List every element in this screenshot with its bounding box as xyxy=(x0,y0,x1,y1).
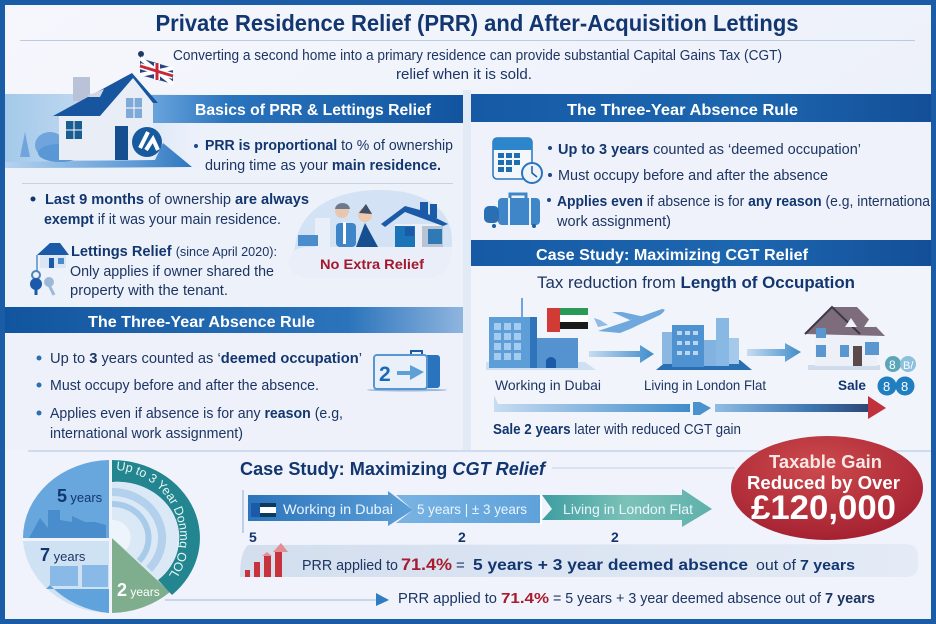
bullet list: international work assignment) xyxy=(50,425,243,442)
lettings relief text: property with the tenant. xyxy=(70,282,228,299)
callout: taxable gain reduced: £120,000 xyxy=(751,489,896,527)
pie chart: occupation years: 7 years xyxy=(40,545,86,565)
bullet list: Must occupy before and after the absence xyxy=(558,167,828,184)
bullet list: Up to 3 years counted as ‘deemed occupation’ xyxy=(50,350,362,367)
bullet list xyxy=(547,141,931,230)
house badges xyxy=(885,356,916,372)
bullet: PRR proportional xyxy=(194,137,453,174)
bullet list: Applies even if absence is for any reason (e.g, internationa xyxy=(557,193,931,210)
bullet list: Up to 3 years counted as ‘deemed occupation’ xyxy=(558,141,861,158)
panel: case study with occupation timeline xyxy=(471,240,931,450)
arrow: timeline xyxy=(494,395,886,419)
arrow: Dubai to London xyxy=(589,345,654,363)
callout: taxable gain reduced: Taxable Gain xyxy=(769,452,882,472)
result band: PRR applied xyxy=(240,543,918,577)
lettings relief text: Lettings Relief (since April 2020): xyxy=(71,243,277,260)
bullet: last 9 months xyxy=(30,191,309,228)
result band: PRR applied: PRR applied to xyxy=(302,557,398,574)
timeline caption: Sale 2 years later with reduced CGT gain xyxy=(493,422,741,438)
arrow: London to sale xyxy=(747,343,801,362)
house badges: B/ xyxy=(903,360,914,372)
result text: 71.4% xyxy=(501,591,549,607)
arrow band: timeline stages: Working in Dubai xyxy=(283,501,393,517)
pie chart: occupation years xyxy=(23,460,200,613)
icon: bar chart xyxy=(245,543,288,577)
panel: three-year absence rule, right: The Three-Year Absence Rule xyxy=(567,102,798,119)
icon: house and keys xyxy=(30,243,69,295)
icon: small house xyxy=(381,202,448,247)
bullet list: Must occupy before and after the absence. xyxy=(50,377,319,394)
chart subtitle: Tax reduction from Length of Occupation xyxy=(537,273,855,292)
intro text: relief when it is sold. xyxy=(396,66,532,83)
callout: taxable gain reduced: Reduced by Over xyxy=(747,473,900,493)
panel: three-year absence rule, right xyxy=(471,94,931,240)
timeline labels: Living in London Flat xyxy=(644,377,766,393)
callout: no extra relief: No Extra Relief xyxy=(320,256,424,272)
icon: sale house xyxy=(805,307,916,372)
arrow band: timeline stages: Living in London Flat xyxy=(563,501,693,517)
icon: flag xyxy=(251,503,276,517)
sale badges: 8 xyxy=(883,379,890,394)
result band: PRR applied: out of xyxy=(756,557,797,574)
icon: advisers xyxy=(298,203,378,247)
panel: lower case study xyxy=(23,450,931,619)
icon: suitcase with arrow xyxy=(367,351,447,392)
house badges: 8 xyxy=(889,358,896,372)
icon: union flag xyxy=(138,51,173,84)
result text xyxy=(398,591,875,607)
bullet: last 9 months: Last 9 months of ownership are always xyxy=(45,191,309,208)
callout: no extra relief xyxy=(288,190,452,278)
result band: PRR applied: = xyxy=(456,557,465,574)
panel: basics of PRR and lettings relief xyxy=(5,51,463,307)
timeline numbers: 2 xyxy=(458,529,466,545)
pie labels: 5 years xyxy=(57,486,103,506)
intro text xyxy=(173,47,782,83)
icon: luggage xyxy=(484,194,540,228)
bullet: last 9 months: exempt if it was your main residence. xyxy=(44,211,281,228)
lettings relief text: Only applies if owner shared the xyxy=(70,263,274,280)
icon: Dubai buildings xyxy=(486,298,596,370)
bullet list: Applies even if absence is for any reason (e.g, xyxy=(50,405,343,422)
sale badges: 8 xyxy=(901,379,908,394)
heading: case study: Case Study: Maximizing CGT Relief xyxy=(240,459,547,479)
curved ring label: Up to 3 Year Donmg OOL xyxy=(117,462,187,576)
bullet list: work assignment) xyxy=(556,213,671,230)
result band: PRR applied: 71.4% xyxy=(401,555,452,574)
icon: house with flag xyxy=(5,51,192,168)
title: Private Residence Relief (PRR) and After-Acquisition Lettings xyxy=(156,10,798,36)
timeline labels: Sale xyxy=(838,377,866,393)
icon: plane xyxy=(594,309,665,333)
intro text: Converting a second home into a primary residence can provide substantial Capital Gains Tax (CGT) xyxy=(173,47,782,64)
timeline labels xyxy=(495,377,866,393)
arrow band: timeline stages xyxy=(243,489,712,533)
lettings relief text xyxy=(70,243,277,299)
panel: three-year absence rule, left xyxy=(5,307,463,450)
panel: case study with occupation timeline: Case Study: Maximizing CGT Relief xyxy=(536,247,809,264)
icon: London buildings xyxy=(656,318,752,370)
timeline numbers: 5 xyxy=(249,529,257,545)
result band: PRR applied: 7 years xyxy=(800,557,855,574)
result text: 7 years xyxy=(825,591,875,607)
arrow: result line xyxy=(165,593,389,606)
timeline labels: Working in Dubai xyxy=(495,377,601,393)
icon: calendar and clock xyxy=(493,138,542,183)
callout: taxable gain reduced xyxy=(731,436,923,540)
pie chart: occupation years: 2 years xyxy=(117,580,160,600)
bullet: PRR proportional: PRR is proportional to % of ownership xyxy=(205,137,453,154)
panel: three-year absence rule, left: The Three-Year Absence Rule xyxy=(88,314,315,331)
icon: UAE flag xyxy=(547,308,588,332)
result text: = 5 years + 3 year deemed absence out of xyxy=(553,591,822,607)
result text: PRR applied to xyxy=(398,591,497,607)
sale badges xyxy=(878,376,914,396)
panel: basics of PRR and lettings relief: Basics of PRR & Lettings Relief xyxy=(195,102,432,119)
bullet list xyxy=(36,350,362,442)
bullet: PRR proportional: during time as your main residence. xyxy=(205,157,441,174)
timeline numbers xyxy=(249,529,619,545)
arrow band: timeline stages: 5 years | ± 3 years xyxy=(417,501,527,517)
timeline numbers: 2 xyxy=(611,529,619,545)
result band: PRR applied: 5 years + 3 year deemed absence xyxy=(473,557,748,574)
icon: suitcase with arrow: 2 xyxy=(379,363,391,386)
